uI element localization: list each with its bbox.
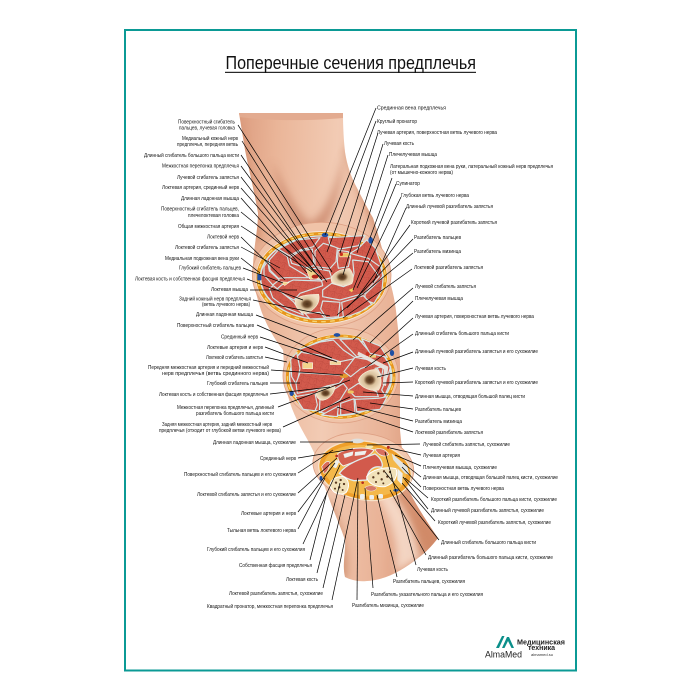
label: anterior interosseous artery and nerve: [148, 364, 343, 377]
label: median nerve, middle: [221, 334, 337, 362]
label: extensor digitorum tendons: [377, 495, 465, 585]
label: palmaris longus: [181, 196, 307, 273]
label: superficial branch of radial nerve: Поверхностная ветвь лучевого нерва: [423, 486, 505, 492]
label: extensor digiti minimi: Разгибатель мизинца: [414, 249, 462, 255]
label: extensor digitorum, middle: Разгибатель пальцев: [415, 407, 461, 413]
bones: [358, 369, 381, 390]
bones: [330, 468, 397, 494]
label: flexor carpi radialis: [177, 174, 315, 272]
label: extensor carpi radialis longus, middle: [383, 348, 538, 363]
label: pronator teres: [327, 118, 417, 252]
label: posterior cutaneous nerve: Задний кожный нерв предплечья: [179, 296, 251, 302]
label: cephalic vein, lateral cutaneous nerve: Латеральная подкожная вена руки, латеральный кожный нерв предплечья: [390, 163, 553, 170]
callouts: right, lower section: [367, 441, 558, 561]
label: extensor carpi ulnaris tendon: Локтевой разгибатель запястья, сухожилие: [229, 590, 323, 597]
label: dorsal branch of ulnar nerve: [227, 478, 325, 534]
label: flexor digitorum superficialis tendons: Поверхностный сгибатель пальцев и его сухожилия: [184, 471, 296, 478]
label: abductor pollicis longus, middle: Длинная мышца, отводящая большой палец кисти: [415, 393, 525, 400]
skin and fascia rings: [252, 222, 391, 328]
label: ulnar artery and nerve, lower: Локтевые артерия и нерв: [241, 511, 296, 517]
label: extensor carpi ulnaris: Локтевой разгибатель запястья: [414, 264, 483, 271]
label: flexor digitorum superficialis, humeroulnar head: Поверхностный сгибатель пальцев,: [161, 206, 239, 212]
arm body: [239, 113, 438, 582]
label: radial artery: [390, 448, 460, 459]
label: flexor digitorum superficialis tendons: [184, 450, 333, 478]
label: ulna and fascia, middle: Локтевая кость и собственная фасция предплечья: [159, 392, 268, 398]
label: posterior interosseous artery and nerve: [159, 397, 350, 434]
tendon strands: [357, 352, 388, 386]
label: extensor carpi ulnaris, middle: [337, 407, 483, 436]
label: ulna, lower: Локтевая кость: [286, 577, 318, 583]
cross-section 3: [309, 427, 418, 507]
label: cephalic vein, lateral cutaneous nerve: (от мышечно-кожного нерва): [390, 170, 453, 176]
logo: AlmaMed: [485, 650, 522, 660]
label: flexor digitorum profundus, middle: Глубокий сгибатель пальцев: [207, 380, 268, 387]
label: flexor pollicis longus, lower: [385, 472, 536, 546]
label: extensor digitorum, middle: [370, 403, 461, 413]
label: posterior cutaneous nerve: (ветвь лучевого нерва): [202, 302, 250, 308]
label: median nerve, lower: Срединный нерв: [260, 455, 296, 462]
label: flexor carpi ulnaris, middle: Локтевой сгибатель запястья: [206, 354, 263, 361]
title: Поперечные сечения предплечья: [226, 52, 476, 73]
label: flexor carpi ulnaris: [175, 244, 280, 268]
label: flexor pollicis longus, middle: Длинный сгибатель большого пальца кисти: [415, 330, 509, 337]
label: flexor pollicis longus: Длинный сгибатель большого пальца кисти: [144, 152, 239, 159]
skin and fascia rings: [283, 328, 398, 423]
label: palmaris longus, middle: [196, 312, 317, 338]
label: interosseous membrane: [162, 164, 327, 282]
cross-section 2: [283, 328, 398, 423]
label: extensor pollicis longus tendon: Длинный разгибатель большого пальца кисти, сухожилие: [428, 554, 553, 561]
label: extensor carpi radialis brevis tendon: Короткий лучевой разгибатель запястья, сухожилие: [438, 519, 551, 526]
label: anconeus: [211, 287, 297, 293]
skin and fascia rings: [309, 427, 418, 507]
label: extensor pollicis brevis tendon: Короткий разгибатель большого пальца кисти, сухожилие: [431, 496, 557, 503]
label: medial cutaneous nerve: Медиальный кожный нерв: [182, 135, 238, 142]
label: antebrachial fascia: [239, 492, 327, 569]
label: ulna and antebrachial fascia: Локтевая кость и собственная фасция предплечья: [135, 276, 245, 282]
label: anconeus: Локтевая мышца: [211, 287, 249, 293]
label: abductor pollicis longus tendon: [403, 463, 558, 481]
label: flexor digitorum profundus, middle: [207, 380, 300, 387]
label: extensor digiti minimi, middle: [357, 407, 463, 425]
label: ulnar artery and nerve: [207, 345, 308, 363]
label: ulna, lower: [286, 483, 340, 583]
muscles and tendons: [322, 439, 409, 500]
label: superficial branch of radial nerve: [402, 467, 505, 492]
label: ulnar nerve: Локтевой нерв: [207, 234, 239, 240]
label: flexor carpi ulnaris tendon: Локтевой сгибатель запястья и его сухожилие: [197, 491, 296, 498]
label: radius, lower: [385, 452, 448, 573]
label: extensor carpi radialis longus: [373, 203, 493, 283]
label: radial artery, middle: [370, 314, 535, 357]
callouts: left, lower section: [184, 440, 358, 610]
label: pronator teres: Круглый пронатор: [377, 118, 417, 125]
label: posterior interosseous artery and nerve: предплечья (отходит от глубокой ветви лучевого нерва): [159, 427, 281, 434]
label: flexor digitorum superficialis, middle: [177, 322, 332, 358]
label: common interosseous artery: [178, 224, 312, 272]
label: extensor digiti minimi, middle: Разгибатель мизинца: [415, 419, 463, 425]
label: posterior cutaneous nerve: [179, 296, 330, 316]
label: extensor carpi radialis brevis tendon: [402, 483, 551, 526]
label: extensor digiti minimi: [337, 249, 462, 315]
label: brachioradialis tendon: Плечелучевая мышца, сухожилие: [423, 465, 497, 471]
label: extensor indicis: Разгибатель указательного пальца и его сухожилия: [371, 592, 483, 598]
logo: almamed.su: [531, 652, 553, 657]
label: extensor digiti minimi tendon: Разгибатель мизинца, сухожилие: [352, 603, 424, 609]
label: extensor carpi ulnaris tendon: [229, 495, 345, 597]
label: extensor digitorum tendons: Разгибатель пальцев, сухожилия: [393, 579, 465, 585]
label: median antebrachial vein: Срединная вена предплечья: [377, 106, 446, 112]
callouts: left, upper section: [135, 118, 332, 316]
label: palmaris longus: Длинная ладонная мышца: [181, 196, 240, 202]
label: ulnar artery, median nerve: Локтевая артерия, срединный нерв: [162, 184, 239, 191]
label: flexor carpi ulnaris, middle: [206, 354, 287, 362]
logo: [485, 636, 565, 660]
label: posterior interosseous artery and nerve: Задняя межкостная артерия, задний межкостный нерв: [162, 421, 272, 428]
label: flexor carpi radialis, middle: [353, 283, 476, 340]
label: extensor digitorum: [347, 235, 461, 308]
label: interosseous membrane, extensor pollicis longus: Межкостная перепонка предплечья, длинный: [177, 404, 274, 411]
label: flexor carpi ulnaris tendon: [197, 458, 337, 498]
label: anterior interosseous artery and nerve: Передняя межкостная артерия и передний межкостный: [148, 364, 269, 371]
label: brachioradialis, middle: Плечелучевая мышца: [415, 296, 464, 302]
label: extensor indicis: [365, 488, 483, 598]
label: extensor carpi radialis longus tendon: [403, 477, 544, 514]
label: extensor carpi radialis brevis: Короткий лучевой разгибатель запястья: [411, 219, 497, 226]
label: extensor carpi radialis brevis, middle: Короткий лучевой разгибатель запястья и его сухожилие: [415, 379, 538, 386]
label: cephalic vein, lateral cutaneous nerve: [370, 163, 553, 238]
label: radial artery, upper: Лучевая артерия, поверхностная ветвь лучевого нерва: [377, 130, 498, 136]
label: pronator quadratus: Квадратный пронатор, межкостная перепонка предплечья: [207, 603, 333, 610]
label: median nerve, middle: Срединный нерв: [221, 334, 258, 340]
vessels and nerves: [289, 333, 394, 396]
label: interosseous membrane, extensor pollicis longus: [177, 380, 350, 417]
cross-section 1: [252, 222, 391, 328]
callouts: bottom: [352, 452, 483, 609]
label: common interosseous artery: Общая межкостная артерия: [178, 224, 239, 230]
label: supinator: Супинатор: [396, 181, 420, 187]
label: brachioradialis tendon: [395, 455, 497, 471]
label: radius, lower: Лучевая кость: [417, 567, 448, 573]
label: ulna and antebrachial fascia: [135, 276, 303, 300]
label: flexor digitorum superficialis, humeroulnar head: плечелоктевая головка: [188, 213, 240, 219]
label: flexor digitorum profundus: Глубокий сгибатель пальцев: [179, 264, 241, 272]
label: antebrachial fascia: Собственная фасция предплечья: [239, 563, 312, 569]
label: flexor digitorum superficialis, radial head: пальцев, лучевая головка: [179, 125, 236, 131]
label: flexor digitorum superficialis, humeroulnar head: [161, 206, 322, 278]
label: medial cutaneous nerve: предплечья, передняя ветвь: [177, 142, 238, 148]
label: median antebrachial vein: [325, 106, 446, 235]
label: ulnar artery, median nerve: [162, 184, 322, 280]
label: deep branch of radial nerve: [357, 193, 470, 288]
label: ulnar nerve: [207, 234, 285, 280]
label: radius, middle: Лучевая кость: [415, 366, 446, 372]
label: extensor carpi ulnaris, middle: Локтевой разгибатель запястья: [415, 429, 483, 436]
label: extensor pollicis longus tendon: [390, 490, 553, 561]
muscles: [291, 339, 391, 417]
label: flexor pollicis longus, middle: [365, 330, 509, 368]
logo: Медицинская: [517, 639, 565, 646]
label: ulnar artery and nerve: Локтевые артерия и нерв: [207, 345, 263, 351]
label: median nerve, lower: [260, 449, 353, 462]
label: radial artery: Лучевая артерия: [423, 453, 460, 459]
label: flexor digitorum profundus: [179, 264, 283, 283]
muscles: [264, 236, 383, 319]
vessels and nerves: [257, 233, 373, 292]
label: radial artery, middle: Лучевая артерия, поверхностная ветвь лучевого нерва: [415, 314, 535, 320]
label: interosseous membrane, extensor pollicis longus: разгибатель большого пальца кисти: [196, 411, 274, 417]
label: radius, upper: Лучевая кость: [384, 141, 414, 147]
label: flexor carpi radialis: Лучевой сгибатель запястья: [177, 174, 239, 181]
arm illustration: [239, 113, 438, 582]
label: flexor carpi radialis tendon: Лучевой сгибатель запястья, сухожилие: [423, 441, 510, 448]
label: abductor pollicis longus tendon: Длинная мышца, отводящая большой палец кисти, сухожилие: [423, 474, 558, 481]
label: extensor digitorum: Разгибатель пальцев: [414, 235, 461, 241]
label: flexor carpi radialis, middle: Лучевой сгибатель запястья: [415, 283, 476, 290]
label: extensor carpi ulnaris: [343, 264, 483, 318]
label: medial cutaneous nerve: [177, 135, 323, 270]
label: interosseous membrane: Межкостная перепонка предплечья: [162, 164, 239, 170]
label: pronator quadratus: [207, 478, 358, 610]
label: flexor digitorum superficialis, radial head: [178, 118, 332, 272]
label: flexor digitorum profundus tendons: [207, 465, 340, 553]
label: extensor digiti minimi tendon: [352, 482, 424, 609]
bones: [331, 268, 353, 285]
label: dorsal branch of ulnar nerve: Тыльная ветвь локтевого нерва: [227, 528, 297, 534]
label: extensor carpi radialis brevis: [357, 219, 497, 298]
page frame: [125, 30, 576, 670]
label: extensor carpi radialis longus tendon: Длинный лучевой разгибатель запястья, сухожилие: [431, 507, 544, 514]
label: flexor pollicis longus: [144, 152, 320, 273]
veins: [319, 476, 399, 492]
label: flexor digitorum superficialis, middle: Поверхностный сгибатель пальцев: [177, 322, 254, 329]
label: palmaris longus, middle: Длинная ладонная мышца: [196, 312, 254, 318]
label: supinator: [353, 181, 420, 290]
label: basilic vein: [165, 256, 260, 273]
label: radius, upper: [343, 141, 414, 275]
callouts: left, middle section: [148, 312, 350, 434]
label: flexor carpi ulnaris: Локтевой сгибатель запястья: [175, 244, 239, 251]
label: flexor digitorum profundus tendons: Глубокий сгибатель пальцев и его сухожилия: [207, 546, 305, 553]
label: brachioradialis, upper: Плечелучевая мышца: [389, 152, 438, 158]
label: basilic vein: Медиальная подкожная вена руки: [165, 256, 239, 262]
label: extensor carpi radialis longus: Длинный лучевой разгибатель запястья: [406, 203, 493, 210]
label: ulnar artery and nerve, lower: [241, 463, 335, 517]
label: brachioradialis, middle: [370, 296, 464, 343]
logo: техника: [528, 645, 555, 652]
label: deep branch of radial nerve: Глубокая ветвь лучевого нерва: [401, 193, 470, 199]
label: abductor pollicis longus, middle: [363, 392, 525, 400]
label: extensor carpi radialis longus, middle: Длинный лучевой разгибатель запястья и его сухожилие: [415, 348, 538, 355]
icon: logo mark: [496, 636, 514, 648]
label: extensor pollicis brevis tendon: [405, 478, 557, 503]
label: anterior interosseous artery and nerve: нерв предплечья (ветвь срединного нерва): [162, 371, 269, 377]
label: brachioradialis, upper: [357, 152, 438, 253]
label: flexor pollicis longus, lower: Длинный сгибатель большого пальца кисти: [441, 539, 536, 546]
callouts: right, upper section: [325, 106, 553, 318]
callouts: right, middle section: [337, 283, 538, 436]
label: palmaris longus tendon: Длинная ладонная мышца, сухожилие: [213, 440, 296, 446]
label: radial artery, upper: [340, 130, 498, 253]
label: radius, middle: [377, 366, 446, 377]
label: ulna and fascia, middle: [159, 387, 330, 398]
label: flexor digitorum superficialis, radial head: Поверхностный сгибатель: [178, 118, 235, 125]
